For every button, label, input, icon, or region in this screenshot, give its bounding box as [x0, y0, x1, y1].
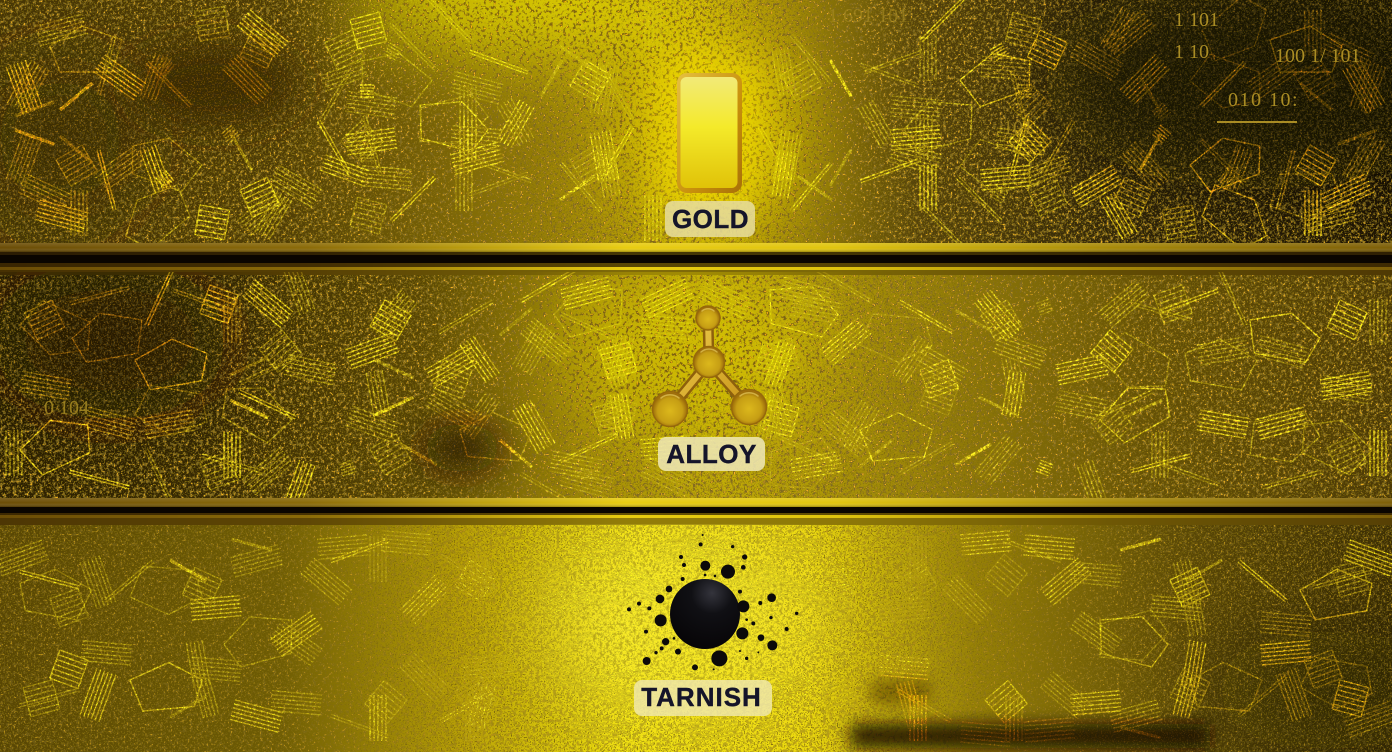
label: TARNISH: TARNISH — [641, 682, 762, 712]
divider rail: lower — [0, 498, 1392, 525]
icon: gold bar — [655, 55, 765, 210]
label: ALLOY: ALLOY — [666, 439, 757, 469]
etched numerals: gold band: 1 10 — [1174, 41, 1209, 63]
icon: tarnish blot — [627, 534, 798, 670]
label: GOLD: GOLD — [672, 204, 749, 234]
etched numerals: alloy band: 0 104 — [44, 397, 89, 419]
crystal texture: tarnish band — [0, 531, 1392, 746]
panel: tarnish band — [0, 525, 1392, 752]
etched numerals: gold band: 101 — [1003, 117, 1033, 139]
panel: gold band — [0, 0, 1392, 256]
crystal texture: gold band — [6, 0, 1386, 256]
panel: alloy band — [0, 260, 1392, 509]
etched numerals: gold band: 100 1/ 101 — [1275, 45, 1361, 67]
crystal texture: alloy band — [6, 266, 1386, 509]
icon: alloy molecule — [652, 306, 766, 426]
etched numerals: gold band: 010 10: — [1228, 89, 1299, 111]
etched numerals: gold band: 1 101 — [1174, 9, 1219, 31]
divider rail: upper — [0, 243, 1392, 275]
etched numerals: gold band: 1 691 101 — [828, 5, 908, 27]
etched numerals: gold band — [793, 5, 1361, 139]
etched numerals: gold band: 01 — [793, 77, 813, 99]
